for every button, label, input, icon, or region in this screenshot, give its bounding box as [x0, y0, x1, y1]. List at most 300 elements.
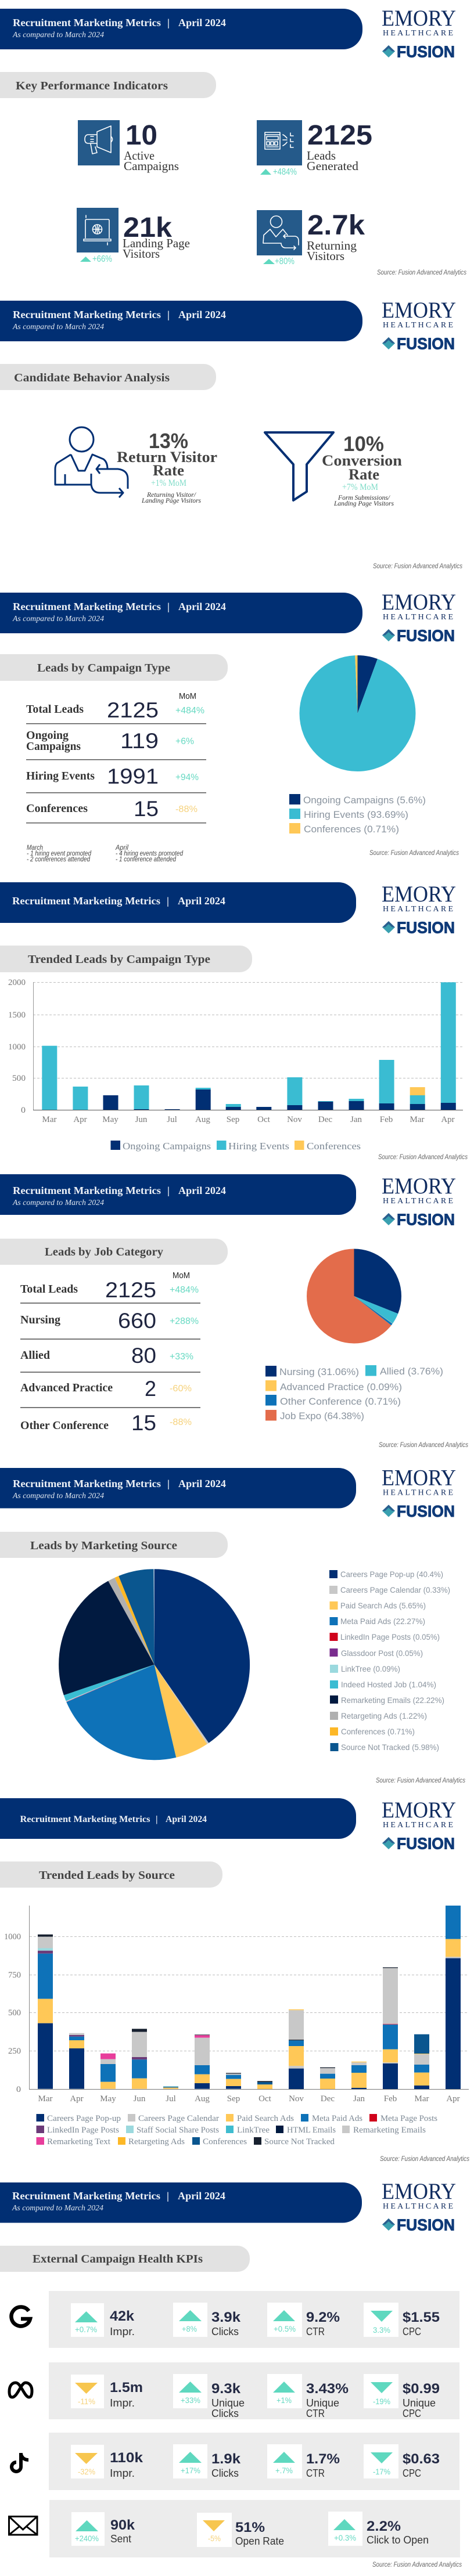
stacked bar chart: leads by campaign type: May [102, 1115, 119, 1124]
header band: campaign type page: April 2024 [178, 601, 226, 612]
panel: Google KPIs: +0.7% [75, 2325, 97, 2334]
legend: source bars: Staff Social Share Posts [137, 2126, 219, 2135]
panel: Meta KPIs: $0.99 [403, 2381, 440, 2397]
stacked bar chart: leads by source: Jul [166, 2094, 176, 2104]
table: leads by job category: Nursing [20, 1314, 60, 1326]
stacked bar chart: leads by source: Mar [415, 2094, 429, 2104]
KPI: leads generated [257, 120, 372, 177]
stacked bar: Jan [351, 2062, 367, 2089]
stacked bar chart: leads by source: Nov [289, 2094, 304, 2104]
panel: TikTok KPIs: CTR [306, 2467, 325, 2479]
legend: marketing source pie: Conferences (0.71%) [341, 1727, 415, 1736]
header band: job category page: | [167, 1185, 170, 1196]
panel: Meta KPIs: Unique [306, 2397, 339, 2409]
panel: Meta KPIs: Impr. [110, 2397, 135, 2409]
logo: Emory Healthcare and Fusion [382, 298, 456, 353]
heading: Trended Leads by Source [0, 1861, 222, 1888]
logo: Emory Healthcare and Fusion: EMORY [382, 6, 456, 31]
KPI: landing page visitors: 21k [123, 212, 172, 243]
header band: trended campaign type page: April 2024 [178, 895, 225, 907]
stacked bar: May [100, 2054, 116, 2089]
KPI: returning visitors: Returning [307, 239, 357, 252]
table: leads by campaign type: MoM [179, 691, 196, 701]
table: leads by job category: +33% [170, 1352, 193, 1362]
stacked bar chart: leads by source: Jun [134, 2094, 146, 2104]
panel: Google KPIs: +0.5% [274, 2324, 296, 2333]
heading: Leads by Campaign Type [0, 654, 228, 681]
logo: Emory Healthcare and Fusion: EMORY [382, 882, 456, 907]
stacked bar chart: leads by campaign type: Apr [441, 1115, 455, 1124]
panel: Meta KPIs: Clicks [211, 2408, 239, 2419]
heading: Leads by Job Category: Leads by Job Category [45, 1246, 163, 1258]
panel: Google KPIs: CPC [403, 2326, 421, 2337]
legend: campaign type bars: Ongoing Campaigns [123, 1141, 211, 1152]
stacked bar: Apr [69, 2033, 84, 2089]
stacked bar chart: leads by source: 250 [8, 2047, 21, 2056]
panel: TikTok KPIs: Impr. [110, 2467, 135, 2479]
table: leads by campaign type: +94% [175, 773, 199, 782]
logo: Emory Healthcare and Fusion [382, 882, 456, 937]
legend: source bars: Careers Page Pop-up [47, 2114, 121, 2123]
header band: trended source page: Recruitment Marketing Metrics [20, 1814, 150, 1824]
legend: marketing source pie: Meta Paid Ads (22.27%) [340, 1617, 425, 1626]
header band: KPI page: Recruitment Marketing Metrics [13, 17, 161, 28]
panel: Meta KPIs: -19% [373, 2397, 390, 2406]
legend: campaign type pie: Hiring Events (93.69%) [304, 809, 408, 820]
KPI: leads generated: Leads [307, 149, 336, 163]
table: leads by job category: Advanced Practice [20, 1381, 113, 1394]
stacked bar: Apr [446, 1906, 461, 2089]
stacked bar chart: leads by source [4, 1906, 469, 2104]
panel: TikTok KPIs: -17% [373, 2467, 390, 2476]
pie chart: marketing source [106, 1617, 202, 1712]
table: leads by campaign type: 15 [134, 797, 159, 821]
stacked bar chart: leads by source: 1000 [4, 1932, 21, 1942]
icon: returning visitor [55, 427, 128, 497]
metric: return visitor rate: +1% MoM [151, 478, 186, 488]
notes: March and April activity: - 2 conferences attended [27, 855, 90, 863]
icon: email envelope [9, 2517, 37, 2535]
stacked bar chart: leads by campaign type: Feb [380, 1115, 393, 1124]
panel: Google KPIs: 42k [110, 2308, 135, 2324]
table: leads by campaign type: +6% [175, 737, 194, 746]
heading: Leads by Marketing Source: Leads by Marketing Source [30, 1539, 177, 1552]
KPI: returning visitors [257, 210, 365, 266]
metric: conversion rate: Form Submissions/ [337, 493, 391, 502]
header band: campaign type page [0, 593, 362, 633]
table: leads by campaign type: Campaigns [26, 740, 81, 753]
header band: job category page: As compared to March 2024 [12, 1199, 104, 1207]
panel: email KPIs: +240% [75, 2534, 99, 2543]
metric: conversion rate: Landing Page Visitors [333, 499, 394, 507]
stacked bar chart: leads by campaign type: Dec [318, 1115, 332, 1124]
header band: candidate behavior page: Recruitment Marketing Metrics [13, 309, 161, 320]
heading: Candidate Behavior Analysis: Candidate Behavior Analysis [14, 371, 170, 384]
stacked bar chart: leads by source: Apr [446, 2094, 460, 2104]
stacked bar: Nov [289, 2009, 304, 2089]
stacked bar: Sep [226, 2073, 241, 2089]
logo: Emory Healthcare and Fusion: FUSION [397, 1834, 455, 1853]
metric: conversion rate: Conversion [322, 452, 403, 469]
heading: Leads by Job Category [0, 1239, 228, 1265]
stacked bar chart: leads by source: Feb [384, 2094, 397, 2104]
KPI: active campaigns: Active [124, 149, 155, 163]
icon: Meta [9, 2383, 32, 2397]
stacked bar chart: leads by campaign type: Jan [350, 1115, 362, 1124]
KPI: leads generated: 2125 [307, 120, 372, 151]
metric: conversion rate: Rate [349, 466, 379, 483]
legend: campaign type bars: Conferences [307, 1141, 361, 1152]
logo: Emory Healthcare and Fusion: HEALTHCARE [383, 29, 453, 38]
logo: Emory Healthcare and Fusion: EMORY [382, 2179, 456, 2204]
header band: marketing source page: | [167, 1478, 170, 1489]
stacked bar: Aug [195, 2034, 210, 2089]
stacked bar chart: leads by source: 500 [8, 2008, 21, 2018]
legend: source bars: Remarketing Text [47, 2137, 110, 2146]
heading: Key Performance Indicators [0, 72, 216, 98]
metric: conversion rate: 10% [343, 432, 384, 456]
legend: marketing source pie: LinkTree (0.09%) [341, 1664, 400, 1673]
header band: candidate behavior page [0, 301, 362, 341]
KPI: landing page visitors: +66% [92, 254, 112, 264]
table: leads by job category: Allied [20, 1349, 50, 1362]
header band: job category page: Recruitment Marketing Metrics [13, 1185, 161, 1196]
stacked bar chart: leads by source: Aug [195, 2094, 210, 2104]
stacked bar: Dec [320, 2068, 335, 2089]
legend: source bars: Source Not Tracked [264, 2137, 335, 2146]
header band: campaign type page: Recruitment Marketing Metrics [13, 601, 161, 612]
legend: marketing source pie [329, 1570, 450, 1752]
panel: email KPIs: Open Rate [235, 2535, 284, 2547]
header band: trended source page: April 2024 [166, 1814, 207, 1824]
legend: source bars: Meta Paid Ads [312, 2114, 362, 2123]
logo: Emory Healthcare and Fusion [382, 590, 456, 644]
notes: March and April activity: - 1 conference attended [116, 855, 176, 863]
panel: TikTok KPIs: 1.9k [211, 2451, 241, 2467]
table: leads by campaign type [26, 691, 206, 823]
header band: job category page: April 2024 [178, 1185, 226, 1196]
panel: TikTok KPIs [49, 2433, 459, 2490]
table: leads by job category: 15 [131, 1411, 156, 1435]
header band: marketing source page: As compared to March 2024 [12, 1492, 104, 1500]
metric: return visitor rate: Landing Page Visitors [141, 496, 201, 504]
panel: TikTok KPIs: +17% [181, 2466, 200, 2475]
panel: Meta KPIs: 3.43% [306, 2381, 349, 2397]
logo: Emory Healthcare and Fusion [382, 1465, 456, 1520]
heading: Leads by Campaign Type: Leads by Campaign Type [37, 662, 170, 674]
panel: Meta KPIs: Unique [403, 2397, 436, 2409]
stacked bar chart: leads by campaign type: 1000 [8, 1042, 26, 1052]
notes: March and April activity: - 1 hiring event promoted [27, 849, 91, 857]
stacked bar chart: leads by campaign type: Jun [135, 1115, 148, 1124]
header band: job category page [0, 1174, 356, 1215]
table: leads by job category: 660 [118, 1309, 156, 1333]
metric: conversion rate [322, 432, 403, 507]
header band: candidate behavior page: | [167, 309, 170, 320]
icon: TikTok [12, 2453, 28, 2472]
table: leads by job category: -60% [170, 1384, 192, 1394]
logo: Emory Healthcare and Fusion: FUSION [397, 1502, 455, 1520]
table: leads by campaign type: Conferences [26, 802, 88, 815]
legend: source bars: Conferences [203, 2137, 247, 2146]
heading: Trended Leads by Source: Trended Leads by Source [39, 1869, 175, 1882]
panel: TikTok KPIs: -32% [78, 2467, 95, 2476]
header band: external campaign page: Recruitment Marketing Metrics [12, 2190, 160, 2202]
stacked bar chart: leads by source: 0 [16, 2085, 21, 2094]
table: leads by campaign type: Hiring Events [26, 770, 95, 782]
legend: campaign type bars [110, 1141, 361, 1152]
legend: marketing source pie: Careers Page Calendar (0.33%) [340, 1585, 450, 1594]
metric: return visitor rate: Returning Visitor/ [146, 490, 197, 499]
header band: external campaign page: April 2024 [178, 2190, 225, 2202]
KPI: landing page visitors: Visitors [123, 247, 160, 261]
legend: source bars: Careers Page Calendar [138, 2114, 219, 2123]
logo: Emory Healthcare and Fusion: HEALTHCARE [383, 1197, 453, 1206]
stacked bar chart: leads by campaign type: Apr [73, 1115, 87, 1124]
legend: marketing source pie: Source Not Tracked (5.98%) [341, 1742, 439, 1752]
legend: marketing source pie: Glassdoor Post (0.05%) [341, 1648, 423, 1658]
logo: Emory Healthcare and Fusion: HEALTHCARE [383, 321, 453, 330]
stacked bar chart: leads by campaign type: 0 [21, 1106, 26, 1115]
metric: return visitor rate [117, 429, 217, 504]
panel: email KPIs: 51% [235, 2520, 265, 2535]
stacked bar chart: leads by campaign type: 500 [12, 1074, 26, 1083]
logo: Emory Healthcare and Fusion: HEALTHCARE [383, 1488, 453, 1498]
KPI: landing page visitors: Landing Page [123, 236, 190, 250]
logo: Emory Healthcare and Fusion [382, 1174, 456, 1228]
heading: External Campaign Health KPIs [0, 2246, 250, 2272]
stacked bar chart: leads by campaign type: Nov [287, 1115, 302, 1124]
panel: Google KPIs: Clicks [211, 2326, 239, 2337]
heading: Trended Leads by Campaign Type [0, 946, 252, 972]
panel: email KPIs: -5% [208, 2534, 221, 2543]
header band: candidate behavior page: April 2024 [178, 309, 226, 320]
legend: job category pie [265, 1365, 443, 1422]
table: leads by campaign type: 119 [120, 729, 159, 753]
metric: return visitor rate: 13% [149, 429, 188, 453]
header band: trended campaign type page [0, 882, 356, 923]
logo: Emory Healthcare and Fusion [382, 1798, 456, 1853]
stacked bar chart: leads by source: Sep [227, 2094, 240, 2104]
legend: source bars: HTML Emails [287, 2126, 336, 2135]
stacked bar chart: leads by campaign type: Oct [257, 1115, 271, 1124]
table: leads by campaign type: +484% [175, 706, 204, 716]
KPI: active campaigns: Campaigns [124, 159, 179, 173]
table: leads by job category: 2 [145, 1377, 156, 1401]
legend: campaign type bars: Hiring Events [228, 1141, 289, 1152]
logo: Emory Healthcare and Fusion: FUSION [397, 1211, 455, 1228]
panel: Google KPIs: 3.3% [373, 2325, 390, 2335]
table: leads by campaign type: 1991 [107, 764, 159, 788]
metric: conversion rate: +7% MoM [342, 482, 378, 492]
stacked bar chart: leads by source: Mar [38, 2094, 52, 2104]
stacked bar chart: leads by campaign type: Sep [227, 1115, 239, 1124]
stacked bar: Oct [257, 2081, 272, 2089]
stacked bar chart: leads by campaign type: Jul [167, 1115, 177, 1124]
logo: Emory Healthcare and Fusion: EMORY [382, 1174, 456, 1199]
legend: marketing source pie: Remarketing Emails (22.22%) [341, 1695, 444, 1705]
panel: Meta KPIs: 9.3k [211, 2381, 241, 2397]
logo: Emory Healthcare and Fusion: EMORY [382, 1465, 456, 1491]
stacked bar: Jun [132, 2029, 147, 2089]
table: leads by job category: -88% [170, 1417, 192, 1427]
logo: Emory Healthcare and Fusion: HEALTHCARE [383, 613, 453, 622]
header band: trended source page [0, 1798, 356, 1839]
metric: return visitor rate: Rate [153, 462, 184, 479]
panel: email KPIs: 90k [110, 2517, 135, 2533]
panel: email KPIs: 2.2% [367, 2519, 401, 2534]
KPI: leads generated: Generated [307, 159, 359, 173]
panel: Google KPIs: $1.55 [403, 2310, 440, 2325]
heading: Trended Leads by Campaign Type: Trended Leads by Campaign Type [28, 953, 210, 966]
panel: Meta KPIs: +1% [276, 2395, 292, 2405]
notes: March and April activity: - 4 hiring events promoted [116, 849, 183, 857]
header band: external campaign page: As compared to March 2024 [12, 2204, 103, 2213]
header band: campaign type page: | [167, 601, 170, 612]
panel: Meta KPIs: CTR [306, 2408, 325, 2419]
panel: Meta KPIs: +33% [181, 2395, 200, 2405]
logo: Emory Healthcare and Fusion: HEALTHCARE [383, 2202, 453, 2211]
stacked bar chart: leads by campaign type [8, 978, 463, 1124]
panel: email KPIs: Sent [110, 2533, 131, 2545]
header band: trended source page: | [156, 1814, 158, 1824]
KPI: returning visitors: Visitors [307, 249, 344, 263]
KPI: active campaigns: 10 [125, 120, 157, 151]
header band: external campaign page: | [167, 2190, 169, 2202]
header band: marketing source page: April 2024 [178, 1478, 226, 1489]
header band: KPI page: As compared to March 2024 [12, 31, 104, 39]
header band: marketing source page: Recruitment Marketing Metrics [13, 1478, 161, 1489]
legend: source bars: Retargeting Ads [128, 2137, 185, 2146]
logo: Emory Healthcare and Fusion: FUSION [397, 918, 455, 937]
notes: March and April activity [27, 843, 183, 863]
legend: source bars: Meta Page Posts [380, 2114, 437, 2123]
panel: Google KPIs: +8% [182, 2324, 197, 2333]
table: leads by campaign type: -88% [175, 804, 198, 814]
KPI: landing page visitors [77, 208, 190, 264]
table: leads by job category: 80 [131, 1344, 156, 1368]
logo: Emory Healthcare and Fusion: EMORY [382, 298, 456, 323]
KPI: active campaigns [78, 120, 179, 173]
legend: job category pie: Allied (3.76%) [380, 1366, 443, 1377]
header band: candidate behavior page: As compared to March 2024 [12, 323, 104, 331]
panel: Google KPIs: 3.9k [211, 2310, 241, 2325]
stacked bar chart: leads by source: Apr [70, 2094, 84, 2104]
metric: return visitor rate: Return Visitor [117, 449, 217, 466]
stacked bar: Mar [414, 2034, 429, 2089]
logo: Emory Healthcare and Fusion [382, 6, 456, 60]
notes: March and April activity: April [115, 843, 128, 852]
panel: Meta KPIs [49, 2362, 459, 2419]
legend: source bars: Paid Search Ads [237, 2114, 294, 2123]
panel: Meta KPIs: 1.5m [110, 2380, 143, 2395]
stacked bar chart: leads by campaign type: 1500 [8, 1011, 26, 1020]
logo: Emory Healthcare and Fusion: HEALTHCARE [383, 905, 453, 914]
panel: TikTok KPIs: 110k [110, 2450, 143, 2466]
stacked bar chart: leads by campaign type: Aug [195, 1115, 210, 1124]
panel: email KPIs [49, 2500, 460, 2557]
legend: source bars: LinkTree [237, 2126, 270, 2135]
table: leads by job category: +484% [170, 1285, 199, 1295]
KPI: leads generated: +484% [273, 167, 297, 177]
table: leads by job category: +288% [170, 1316, 199, 1326]
panel: TikTok KPIs: $0.63 [403, 2451, 440, 2467]
panel: email KPIs: +0.3% [334, 2533, 356, 2542]
KPI: returning visitors: +80% [275, 257, 295, 266]
stacked bar chart: leads by campaign type: Mar [42, 1115, 57, 1124]
legend: job category pie: Other Conference (0.71%) [280, 1396, 401, 1407]
heading: Candidate Behavior Analysis [0, 364, 216, 390]
panel: TikTok KPIs: +.7% [275, 2466, 293, 2475]
stacked bar: Feb [383, 1967, 398, 2089]
header band: KPI page: | [167, 17, 170, 28]
legend: marketing source pie: Careers Page Pop-up (40.4%) [340, 1570, 443, 1579]
logo: Emory Healthcare and Fusion: FUSION [397, 2216, 455, 2234]
stacked bar: Mar [38, 1935, 53, 2089]
panel: Meta KPIs: CPC [403, 2408, 421, 2419]
panel: Meta KPIs: Unique [211, 2397, 245, 2409]
table: leads by job category [20, 1271, 200, 1435]
table: leads by campaign type: 2125 [107, 698, 159, 722]
legend: source bars [36, 2114, 437, 2146]
panel: Google KPIs: 9.2% [306, 2310, 340, 2325]
stacked bar chart: leads by source: May [100, 2094, 116, 2104]
pie chart: campaign type [329, 684, 387, 742]
panel: email KPIs: Click to Open [367, 2534, 429, 2546]
table: leads by job category: 2125 [105, 1278, 156, 1302]
logo: Emory Healthcare and Fusion: HEALTHCARE [383, 1821, 453, 1830]
header band: campaign type page: As compared to March 2024 [12, 615, 104, 623]
panel: Google KPIs [49, 2291, 459, 2348]
stacked bar chart: leads by campaign type: Mar [410, 1115, 424, 1124]
legend: campaign type pie: Ongoing Campaigns (5.6%) [303, 795, 426, 806]
table: leads by job category: MoM [173, 1271, 190, 1280]
legend: source bars: LinkedIn Page Posts [47, 2126, 119, 2135]
header band: KPI page [0, 9, 362, 49]
panel: TikTok KPIs: Clicks [211, 2467, 239, 2479]
panel: Google KPIs: Impr. [110, 2326, 135, 2337]
KPI: returning visitors: 2.7k [307, 210, 365, 241]
table: leads by campaign type: Total Leads [26, 703, 84, 716]
logo: Emory Healthcare and Fusion [382, 2179, 456, 2234]
logo: Emory Healthcare and Fusion: FUSION [397, 334, 455, 353]
logo: Emory Healthcare and Fusion: EMORY [382, 590, 456, 615]
legend: job category pie: Job Expo (64.38%) [280, 1410, 364, 1422]
panel: TikTok KPIs: CPC [403, 2467, 421, 2479]
legend: marketing source pie: Retargeting Ads (1.22%) [341, 1711, 427, 1720]
panel: Meta KPIs: -11% [78, 2397, 95, 2406]
logo: Emory Healthcare and Fusion: FUSION [397, 43, 455, 60]
heading: Key Performance Indicators: Key Performance Indicators [16, 80, 168, 92]
pie chart: job category [331, 1272, 378, 1320]
icon: Google [11, 2307, 30, 2326]
legend: campaign type pie: Conferences (0.71%) [304, 824, 399, 835]
panel: Google KPIs: CTR [306, 2326, 325, 2337]
legend: campaign type pie [289, 794, 426, 835]
header band: external campaign page [0, 2182, 362, 2223]
notes: March and April activity: March [27, 843, 43, 852]
heading: External Campaign Health KPIs: External Campaign Health KPIs [33, 2253, 203, 2265]
stacked bar chart: leads by source: Jan [353, 2094, 365, 2104]
header band: trended campaign type page: | [167, 895, 169, 907]
legend: job category pie: Advanced Practice (0.09%) [280, 1381, 402, 1392]
stacked bar chart: leads by source: Oct [258, 2094, 272, 2104]
panel: TikTok KPIs: 1.7% [306, 2451, 340, 2467]
stacked bar: Jul [163, 2086, 178, 2089]
table: leads by job category: Total Leads [20, 1283, 78, 1296]
table: leads by campaign type: Ongoing [26, 729, 69, 742]
header band: KPI page: April 2024 [178, 17, 226, 28]
